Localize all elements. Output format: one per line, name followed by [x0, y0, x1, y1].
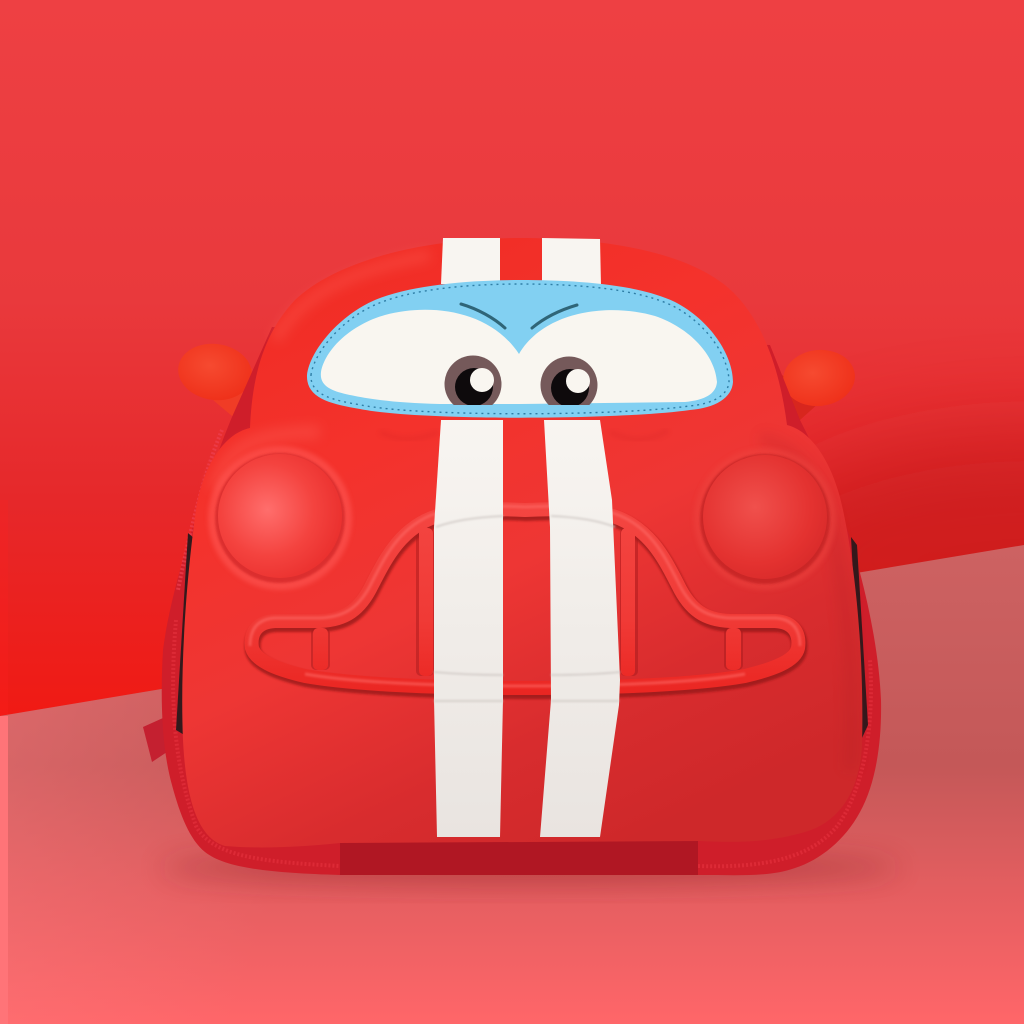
pupil: right [540, 356, 598, 405]
stripe: roof right [542, 238, 601, 286]
cartoon eyes: white [321, 310, 717, 404]
floor shadow [160, 852, 900, 884]
zipper bottom fabric band [340, 840, 698, 875]
eyebrow: left [461, 304, 505, 328]
side zipper pulls [176, 533, 868, 738]
front shell with cabin [182, 238, 862, 847]
stripe tube creases [434, 516, 620, 701]
headlight: right [694, 448, 836, 590]
side strap [143, 718, 167, 762]
stripe: roof left [441, 238, 500, 284]
pupil: left [444, 356, 502, 405]
zipper back layer [162, 327, 881, 875]
scene: red car backpack product photo [0, 238, 1024, 1024]
mirror: right [780, 346, 858, 422]
stripe: hood right [540, 420, 620, 837]
background wall [0, 0, 1024, 720]
stripe: hood left [434, 420, 503, 837]
mirror: left [174, 339, 256, 418]
windshield stitching [311, 284, 729, 414]
headlight: left [208, 446, 352, 590]
eyebrow: right [532, 305, 577, 328]
background floor [0, 545, 1024, 1024]
grille tube [250, 506, 800, 691]
windshield frame: blue [307, 280, 733, 418]
